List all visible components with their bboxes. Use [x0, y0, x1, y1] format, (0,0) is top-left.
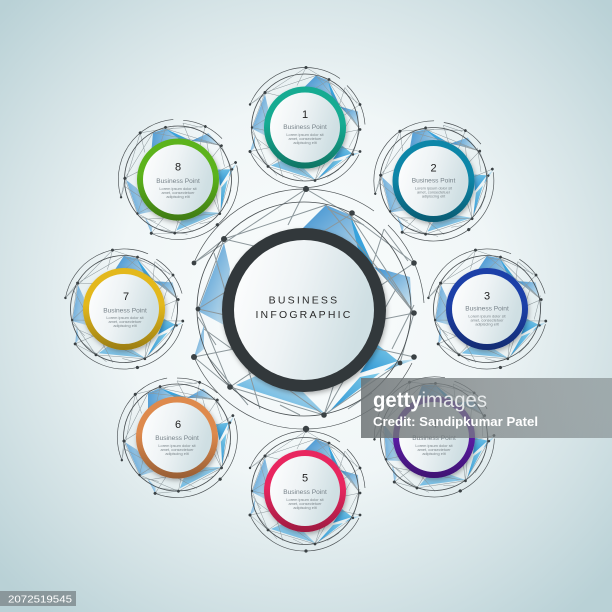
module 6: adipiscing elit [165, 451, 190, 456]
module 8: Lorem ipsum dolor sit [159, 186, 198, 191]
module 7: adipiscing elit [113, 323, 138, 328]
module 7: 7 [123, 291, 129, 303]
module 1: amet, consectetuer [288, 136, 322, 141]
module 4: 4 [431, 418, 437, 430]
module 6: 6 [175, 419, 181, 431]
module 3: 3 [484, 290, 490, 302]
module 1: 1 [302, 109, 308, 121]
module 1 [248, 66, 365, 189]
module 5: Business Point [283, 489, 327, 496]
module 2 [352, 96, 518, 264]
module 5: adipiscing elit [293, 505, 318, 510]
module 3: Business Point [465, 306, 509, 312]
module 6: amet, consectetuer [160, 447, 194, 452]
module 8: Business Point [156, 178, 200, 185]
module 4: amet, consectetuer [417, 447, 451, 452]
module 3: adipiscing elit [475, 322, 500, 326]
module 3: Lorem ipsum dolor sit [468, 314, 507, 318]
module 7 [56, 236, 195, 381]
module 4: Lorem ipsum dolor sit [415, 443, 454, 448]
module 4: Business Point [412, 435, 456, 442]
module 8: 8 [175, 162, 181, 174]
module 5: Lorem ipsum dolor sit [286, 497, 325, 502]
central dark ring [222, 228, 386, 392]
module 4: adipiscing elit [422, 451, 447, 456]
image id tag: 2072519545 [8, 594, 72, 606]
module 5 [248, 430, 365, 553]
module 1: adipiscing elit [293, 140, 318, 145]
module 6: Business Point [155, 435, 199, 442]
module 2: Business Point [412, 178, 455, 184]
module 8 [95, 94, 264, 263]
module 8: adipiscing elit [166, 194, 191, 199]
central title: BUSINESS [269, 294, 339, 306]
watermark banner: Credit: Sandipkumar Patel [373, 414, 538, 429]
module 7: amet, consectetuer [108, 319, 142, 324]
central network art [191, 186, 424, 432]
watermark banner: gettyimages [373, 389, 487, 412]
module 2: adipiscing elit [422, 194, 446, 198]
module 7: Business Point [103, 308, 147, 314]
central hub: business infographic [191, 186, 424, 432]
module 1: Business Point [283, 124, 327, 131]
central disc [234, 240, 374, 380]
watermark banner [361, 378, 612, 438]
central hub: business infographic: INFOGRAPHIC [255, 309, 353, 321]
module 5: 5 [302, 472, 308, 484]
module 5: amet, consectetuer [288, 501, 322, 506]
module 3: amet, consectetuer [470, 318, 504, 322]
image id tag [0, 591, 76, 606]
module 2: amet, consectetuer [417, 190, 451, 194]
module 2: Lorem ipsum dolor sit [415, 186, 453, 190]
module 4 [357, 356, 514, 517]
module 3 [419, 236, 558, 381]
module 6 [94, 352, 263, 521]
module 7: Lorem ipsum dolor sit [106, 315, 145, 320]
module 1: Lorem ipsum dolor sit [286, 132, 325, 137]
module 2: 2 [430, 162, 437, 174]
module 8: amet, consectetuer [161, 190, 195, 195]
module 6: Lorem ipsum dolor sit [158, 443, 197, 448]
